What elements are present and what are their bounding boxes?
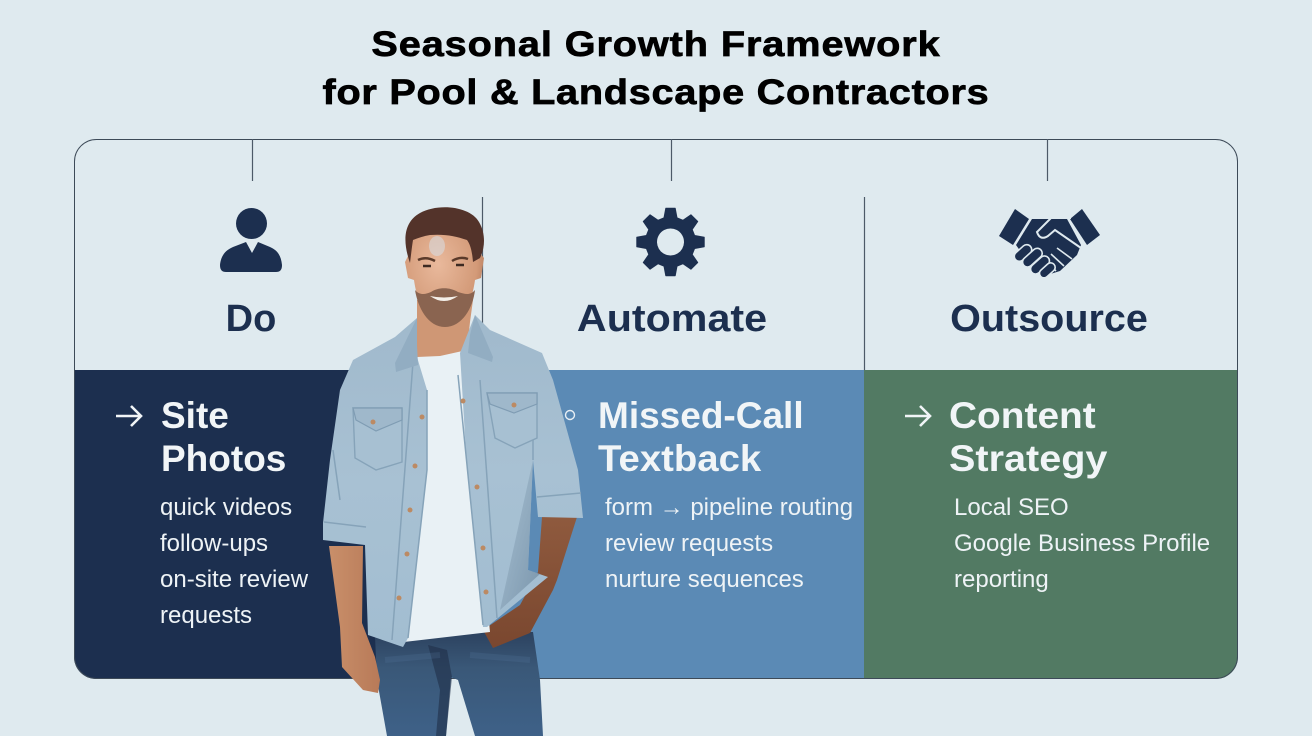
arrow bbox=[116, 405, 143, 427]
denim shirt left bbox=[323, 318, 427, 647]
list: do tasks: requests bbox=[160, 602, 252, 629]
right forearm and hand bbox=[483, 517, 577, 648]
heading: Missed-Call Textback bbox=[598, 395, 804, 479]
shirt shadow bbox=[500, 460, 540, 610]
heading: Content Strategy bbox=[949, 395, 1108, 479]
cuffs and seams bbox=[324, 362, 581, 640]
jeans bbox=[375, 632, 543, 736]
head bbox=[405, 222, 484, 327]
list: automate tasks bbox=[605, 494, 853, 593]
heading: Content Strategy: Content bbox=[949, 395, 1096, 436]
panel: outsource items bbox=[905, 395, 1210, 593]
neck bbox=[417, 300, 473, 357]
icon: handshake bbox=[999, 209, 1100, 277]
heading: Missed-Call Textback: Missed-Call bbox=[598, 395, 804, 436]
list: do tasks: follow-ups bbox=[160, 530, 268, 557]
heading: Outsource: Outsource bbox=[950, 298, 1148, 340]
denim shirt right bbox=[460, 315, 583, 627]
list: outsource tasks: Google Business Profile bbox=[954, 530, 1210, 557]
list: outsource tasks: reporting bbox=[954, 566, 1049, 593]
heading: Do: Do bbox=[226, 298, 276, 340]
arrow bbox=[905, 405, 932, 427]
heading: Site Photos: Photos bbox=[161, 438, 286, 479]
buttons bbox=[370, 398, 516, 600]
left forearm and hand bbox=[329, 546, 380, 693]
collar bbox=[395, 315, 493, 372]
list: automate tasks: nurture sequences bbox=[605, 566, 804, 593]
smile bbox=[430, 296, 458, 301]
list: automate tasks: form → pipeline routing bbox=[605, 494, 853, 521]
title bbox=[322, 25, 989, 112]
heading: Missed-Call Textback: Textback bbox=[598, 438, 761, 479]
framework panel background bbox=[74, 139, 1238, 679]
icon: hidden arrow ring bbox=[566, 410, 574, 420]
panel: automate items bbox=[598, 395, 853, 593]
list: outsource tasks: Local SEO bbox=[954, 494, 1069, 521]
pocket flaps bbox=[353, 393, 537, 431]
list: do tasks bbox=[160, 494, 308, 629]
icon: person bbox=[220, 208, 282, 272]
white t-shirt bbox=[404, 350, 490, 642]
heading: Site Photos bbox=[161, 395, 286, 479]
list: do tasks: on-site review bbox=[160, 566, 308, 593]
heading: Content Strategy: Strategy bbox=[949, 438, 1107, 479]
hair bbox=[405, 207, 484, 263]
heading: Automate: Automate bbox=[577, 298, 767, 340]
title: Seasonal Growth Framework bbox=[371, 25, 941, 64]
list: automate tasks: review requests bbox=[605, 530, 773, 557]
list: outsource tasks bbox=[954, 494, 1210, 593]
chest pockets bbox=[353, 393, 537, 470]
eyes and brows bbox=[418, 258, 468, 261]
title: for Pool & Landscape Contractors bbox=[323, 73, 989, 112]
icon: gear bbox=[636, 208, 705, 276]
beard bbox=[415, 288, 475, 327]
heading: Site Photos: Site bbox=[161, 395, 229, 436]
panel: do items bbox=[116, 395, 308, 629]
forehead highlight bbox=[429, 236, 445, 256]
list: do tasks: quick videos bbox=[160, 494, 292, 521]
